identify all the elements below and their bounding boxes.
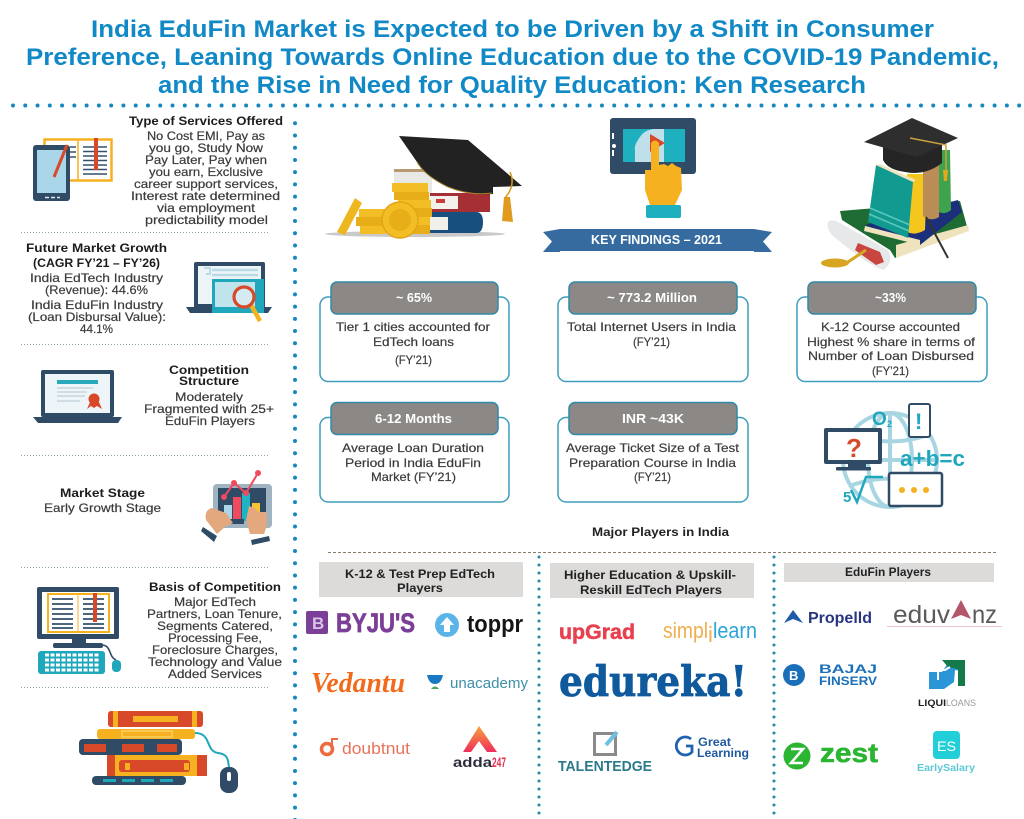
logo: zest: zest bbox=[820, 738, 878, 768]
logo: Great Learning: Great bbox=[698, 735, 731, 749]
text: competition structure: Moderately bbox=[175, 390, 243, 404]
logo: simplilearn: learn bbox=[713, 618, 757, 643]
text: competition structure: Structure bbox=[179, 374, 239, 388]
category label: K-12: Players bbox=[397, 581, 443, 595]
logo: Bajaj Finserv: FINSERV bbox=[819, 674, 877, 688]
text: future market growth: (CAGR FY’21 – FY’26) bbox=[33, 256, 160, 270]
icon: globe with formulas and devices: 5 bbox=[843, 489, 851, 506]
category label: EduFin: EduFin Players bbox=[845, 565, 931, 579]
panel: EduFin players bbox=[783, 563, 1002, 774]
logo: Great Learning: Learning bbox=[697, 746, 749, 760]
text: basis of competition: Major EdTech bbox=[174, 595, 256, 609]
card: loan duration: Market (FY’21) bbox=[371, 470, 456, 484]
logo: Liquiloans bbox=[918, 660, 976, 708]
card: ticket size: (FY’21) bbox=[634, 470, 671, 484]
logo: Byju's: BYJU'S bbox=[336, 608, 415, 638]
card: internet users: Total Internet Users in India bbox=[567, 320, 736, 334]
card: internet users bbox=[558, 282, 748, 382]
icon: laptop with certificate bbox=[33, 370, 122, 423]
logo: simplilearn bbox=[663, 618, 757, 647]
card: ticket size: Average Ticket Size of a Test bbox=[566, 441, 740, 455]
illustration: cap on stack of books bbox=[821, 118, 969, 270]
card: K-12 share: ~33% bbox=[875, 290, 906, 305]
card: K-12 share: (FY’21) bbox=[872, 364, 909, 378]
logo: EarlySalary: EarlySalary bbox=[917, 763, 975, 774]
text: type of services offered: via employment bbox=[157, 201, 256, 215]
text: basis of competition: Added Services bbox=[168, 667, 262, 681]
icon: globe with formulas and devices: a+b=c bbox=[900, 446, 965, 471]
card: ticket size: Preparation Course in India bbox=[569, 456, 736, 470]
icon: globe with formulas and devices: O bbox=[872, 409, 887, 430]
illustration: graduation cap, books and coins bbox=[325, 136, 522, 238]
logo: Bajaj Finserv bbox=[783, 662, 877, 688]
text: market stage: Market Stage bbox=[60, 486, 145, 500]
text: basis of competition: Processing Fee, bbox=[168, 631, 262, 645]
text: market stage bbox=[44, 486, 161, 515]
category label: higher education bbox=[550, 563, 754, 598]
text: competition structure: Fragmented with 25+ bbox=[144, 402, 274, 416]
text: future market growth: India EduFin Industry bbox=[31, 298, 163, 312]
card: ticket size bbox=[558, 402, 748, 502]
text: competition structure: EduFin Players bbox=[165, 414, 255, 428]
heading: major players: Major Players in India bbox=[592, 525, 729, 539]
card: loan duration: Period in India EduFin bbox=[345, 456, 481, 470]
category label: EduFin bbox=[784, 563, 994, 582]
icon: tablet with chart bbox=[201, 470, 272, 545]
category label: higher education: Reskill EdTech Players bbox=[580, 583, 722, 597]
panel: higher education players bbox=[550, 563, 757, 775]
text: type of services offered: you go, Study Now bbox=[149, 141, 263, 155]
logo: Bajaj Finserv: B bbox=[789, 668, 798, 683]
card: 65 percent: (FY’21) bbox=[395, 353, 432, 367]
logo: doubtnut: doubtnut bbox=[342, 739, 410, 758]
text: future market growth: (Loan Disbursal Value): bbox=[28, 310, 166, 324]
icon: desktop computer with book bbox=[37, 587, 121, 674]
text: basis of competition: Foreclosure Charges, bbox=[152, 643, 278, 657]
logo: eduvanz: nz bbox=[972, 601, 997, 629]
logo: Talentedge bbox=[558, 732, 652, 775]
logo: upGrad: upGrad bbox=[559, 621, 635, 644]
logo: Byju's: B bbox=[312, 614, 324, 633]
logo: Propelld: Propelld bbox=[808, 610, 872, 627]
card: internet users: ~ 773.2 Million bbox=[607, 290, 697, 305]
logo: eduvanz bbox=[887, 600, 1002, 629]
category label: K-12: K-12 & Test Prep EdTech bbox=[345, 567, 495, 581]
logo: Liquiloans: LIQUI bbox=[918, 698, 946, 708]
category label: higher education: Higher Education & Upskill- bbox=[564, 568, 736, 582]
logo: simplilearn: i bbox=[708, 622, 713, 647]
logo: Talentedge: TALENTEDGE bbox=[558, 758, 652, 775]
text: type of services offered: career support services, bbox=[134, 177, 278, 191]
logo: toppr bbox=[435, 611, 523, 638]
icon: tablet with video and hand bbox=[610, 118, 696, 218]
text: basis of competition bbox=[147, 580, 282, 681]
text: basis of competition: Segments Catered, bbox=[157, 619, 273, 633]
title: India EduFin Market is Expected to be Driven by a Shift in Consumer bbox=[91, 16, 934, 43]
logo: Bajaj Finserv: BAJAJ bbox=[819, 662, 877, 676]
text: future market growth: India EdTech Industry bbox=[30, 271, 163, 285]
card: loan duration: Average Loan Duration bbox=[342, 441, 484, 455]
panel: left column bbox=[26, 114, 283, 793]
logo: zest bbox=[784, 738, 878, 770]
card: internet users: (FY’21) bbox=[633, 335, 670, 349]
logo: Byju's bbox=[306, 608, 415, 638]
icon: globe with formulas and devices: ! bbox=[915, 409, 922, 434]
text: type of services offered: No Cost EMI, Pay as bbox=[147, 129, 265, 143]
card: 65 percent: EdTech loans bbox=[373, 335, 454, 349]
text: competition structure: Competition bbox=[169, 363, 249, 377]
text: type of services offered: Pay Later, Pay when bbox=[145, 153, 267, 167]
text: type of services offered: you earn, Exclusive bbox=[149, 165, 263, 179]
card: 65 percent: Tier 1 cities accounted for bbox=[336, 320, 490, 334]
icon: tablet and book bbox=[33, 138, 112, 201]
card: 65 percent bbox=[320, 282, 509, 382]
logo: simplilearn: simpl bbox=[663, 618, 708, 643]
logo: EarlySalary: ES bbox=[937, 738, 956, 754]
icon: stack of books with mouse bbox=[79, 711, 238, 793]
title bbox=[26, 16, 999, 99]
card: K-12 share bbox=[797, 282, 987, 382]
logo: EarlySalary bbox=[917, 731, 975, 774]
text: type of services offered bbox=[129, 114, 283, 227]
logo: toppr: toppr bbox=[467, 611, 523, 638]
text: future market growth: (Revenue): 44.6% bbox=[45, 283, 148, 297]
text: market stage: Early Growth Stage bbox=[44, 501, 161, 515]
card: ticket size: INR ~43K bbox=[622, 411, 685, 426]
icon: globe with formulas and devices: 2 bbox=[887, 419, 892, 429]
text: future market growth: Future Market Growth bbox=[26, 241, 167, 255]
logo: adda247 bbox=[453, 726, 506, 770]
panel: K-12 and test prep players bbox=[306, 562, 528, 770]
text: competition structure bbox=[144, 363, 274, 428]
card: K-12 share: Highest % share in terms of bbox=[807, 335, 976, 349]
title: and the Rise in Need for Quality Education: Ken Research bbox=[158, 72, 866, 99]
text: basis of competition: Basis of Competition bbox=[149, 580, 281, 594]
logo: adda247: adda bbox=[453, 754, 492, 770]
card: K-12 share: K-12 Course accounted bbox=[821, 320, 960, 334]
icon: laptop with magnifier bbox=[186, 262, 272, 321]
logo: Liquiloans: LOANS bbox=[946, 698, 976, 708]
card: loan duration: 6-12 Months bbox=[375, 411, 452, 426]
banner: key findings bbox=[543, 229, 772, 252]
text: future market growth: 44.1% bbox=[80, 322, 113, 336]
logo: edureka: edureka! bbox=[559, 657, 747, 706]
text: type of services offered: predictability model bbox=[145, 213, 268, 227]
category label: K-12 bbox=[319, 562, 523, 597]
text: type of services offered: Type of Services Offered bbox=[129, 114, 283, 128]
icon: globe with formulas and devices: ? bbox=[846, 433, 862, 463]
card: 65 percent: ~ 65% bbox=[396, 290, 432, 305]
logo: Vedantu: Vedantu bbox=[311, 668, 405, 699]
banner: key findings: KEY FINDINGS – 2021 bbox=[591, 233, 722, 247]
text: basis of competition: Technology and Value bbox=[148, 655, 282, 669]
logo: Great Learning bbox=[676, 735, 749, 760]
title: Preference, Leaning Towards Online Education due to the COVID-19 Pandemic, bbox=[26, 44, 999, 71]
text: type of services offered: Interest rate determined bbox=[131, 189, 280, 203]
text: future market growth bbox=[26, 241, 167, 336]
text: basis of competition: Partners, Loan Tenure, bbox=[147, 607, 282, 621]
icon: globe with formulas and devices bbox=[824, 404, 965, 507]
logo: adda247: 247 bbox=[492, 754, 506, 770]
logo: unacademy: unacademy bbox=[450, 675, 528, 692]
card: loan duration bbox=[320, 402, 509, 502]
card: K-12 share: Number of Loan Disbursed bbox=[808, 349, 974, 363]
logo: eduvanz: eduv bbox=[893, 601, 951, 629]
